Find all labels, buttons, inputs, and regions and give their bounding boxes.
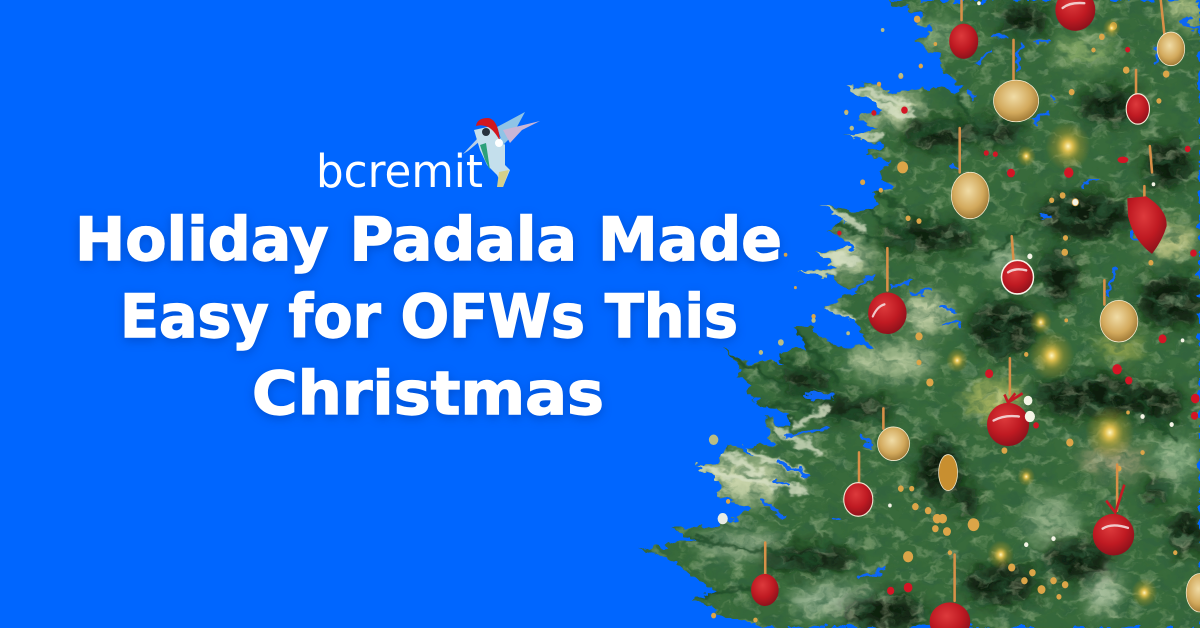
title: Christmas [252, 359, 604, 429]
gold fairy-light dots [711, 16, 1177, 622]
red baubles [751, 0, 1167, 628]
illustration: watercolor christmas tree [638, 0, 1200, 628]
red berries [837, 47, 1200, 595]
white snow flecks [888, 1, 1184, 547]
tree foliage [630, 0, 1200, 628]
ornament strings [765, 0, 1164, 601]
icon: hummingbird [463, 112, 540, 187]
gold baubles [878, 32, 1200, 612]
stray paint specks [709, 28, 903, 524]
sky-blue gaps in foliage [763, 20, 1200, 577]
logo wordmark: bcremit [316, 145, 483, 198]
title: Holiday Padala Made [75, 205, 782, 275]
title: Easy for OFWs This [120, 282, 738, 352]
twinkling lights [946, 18, 1157, 607]
